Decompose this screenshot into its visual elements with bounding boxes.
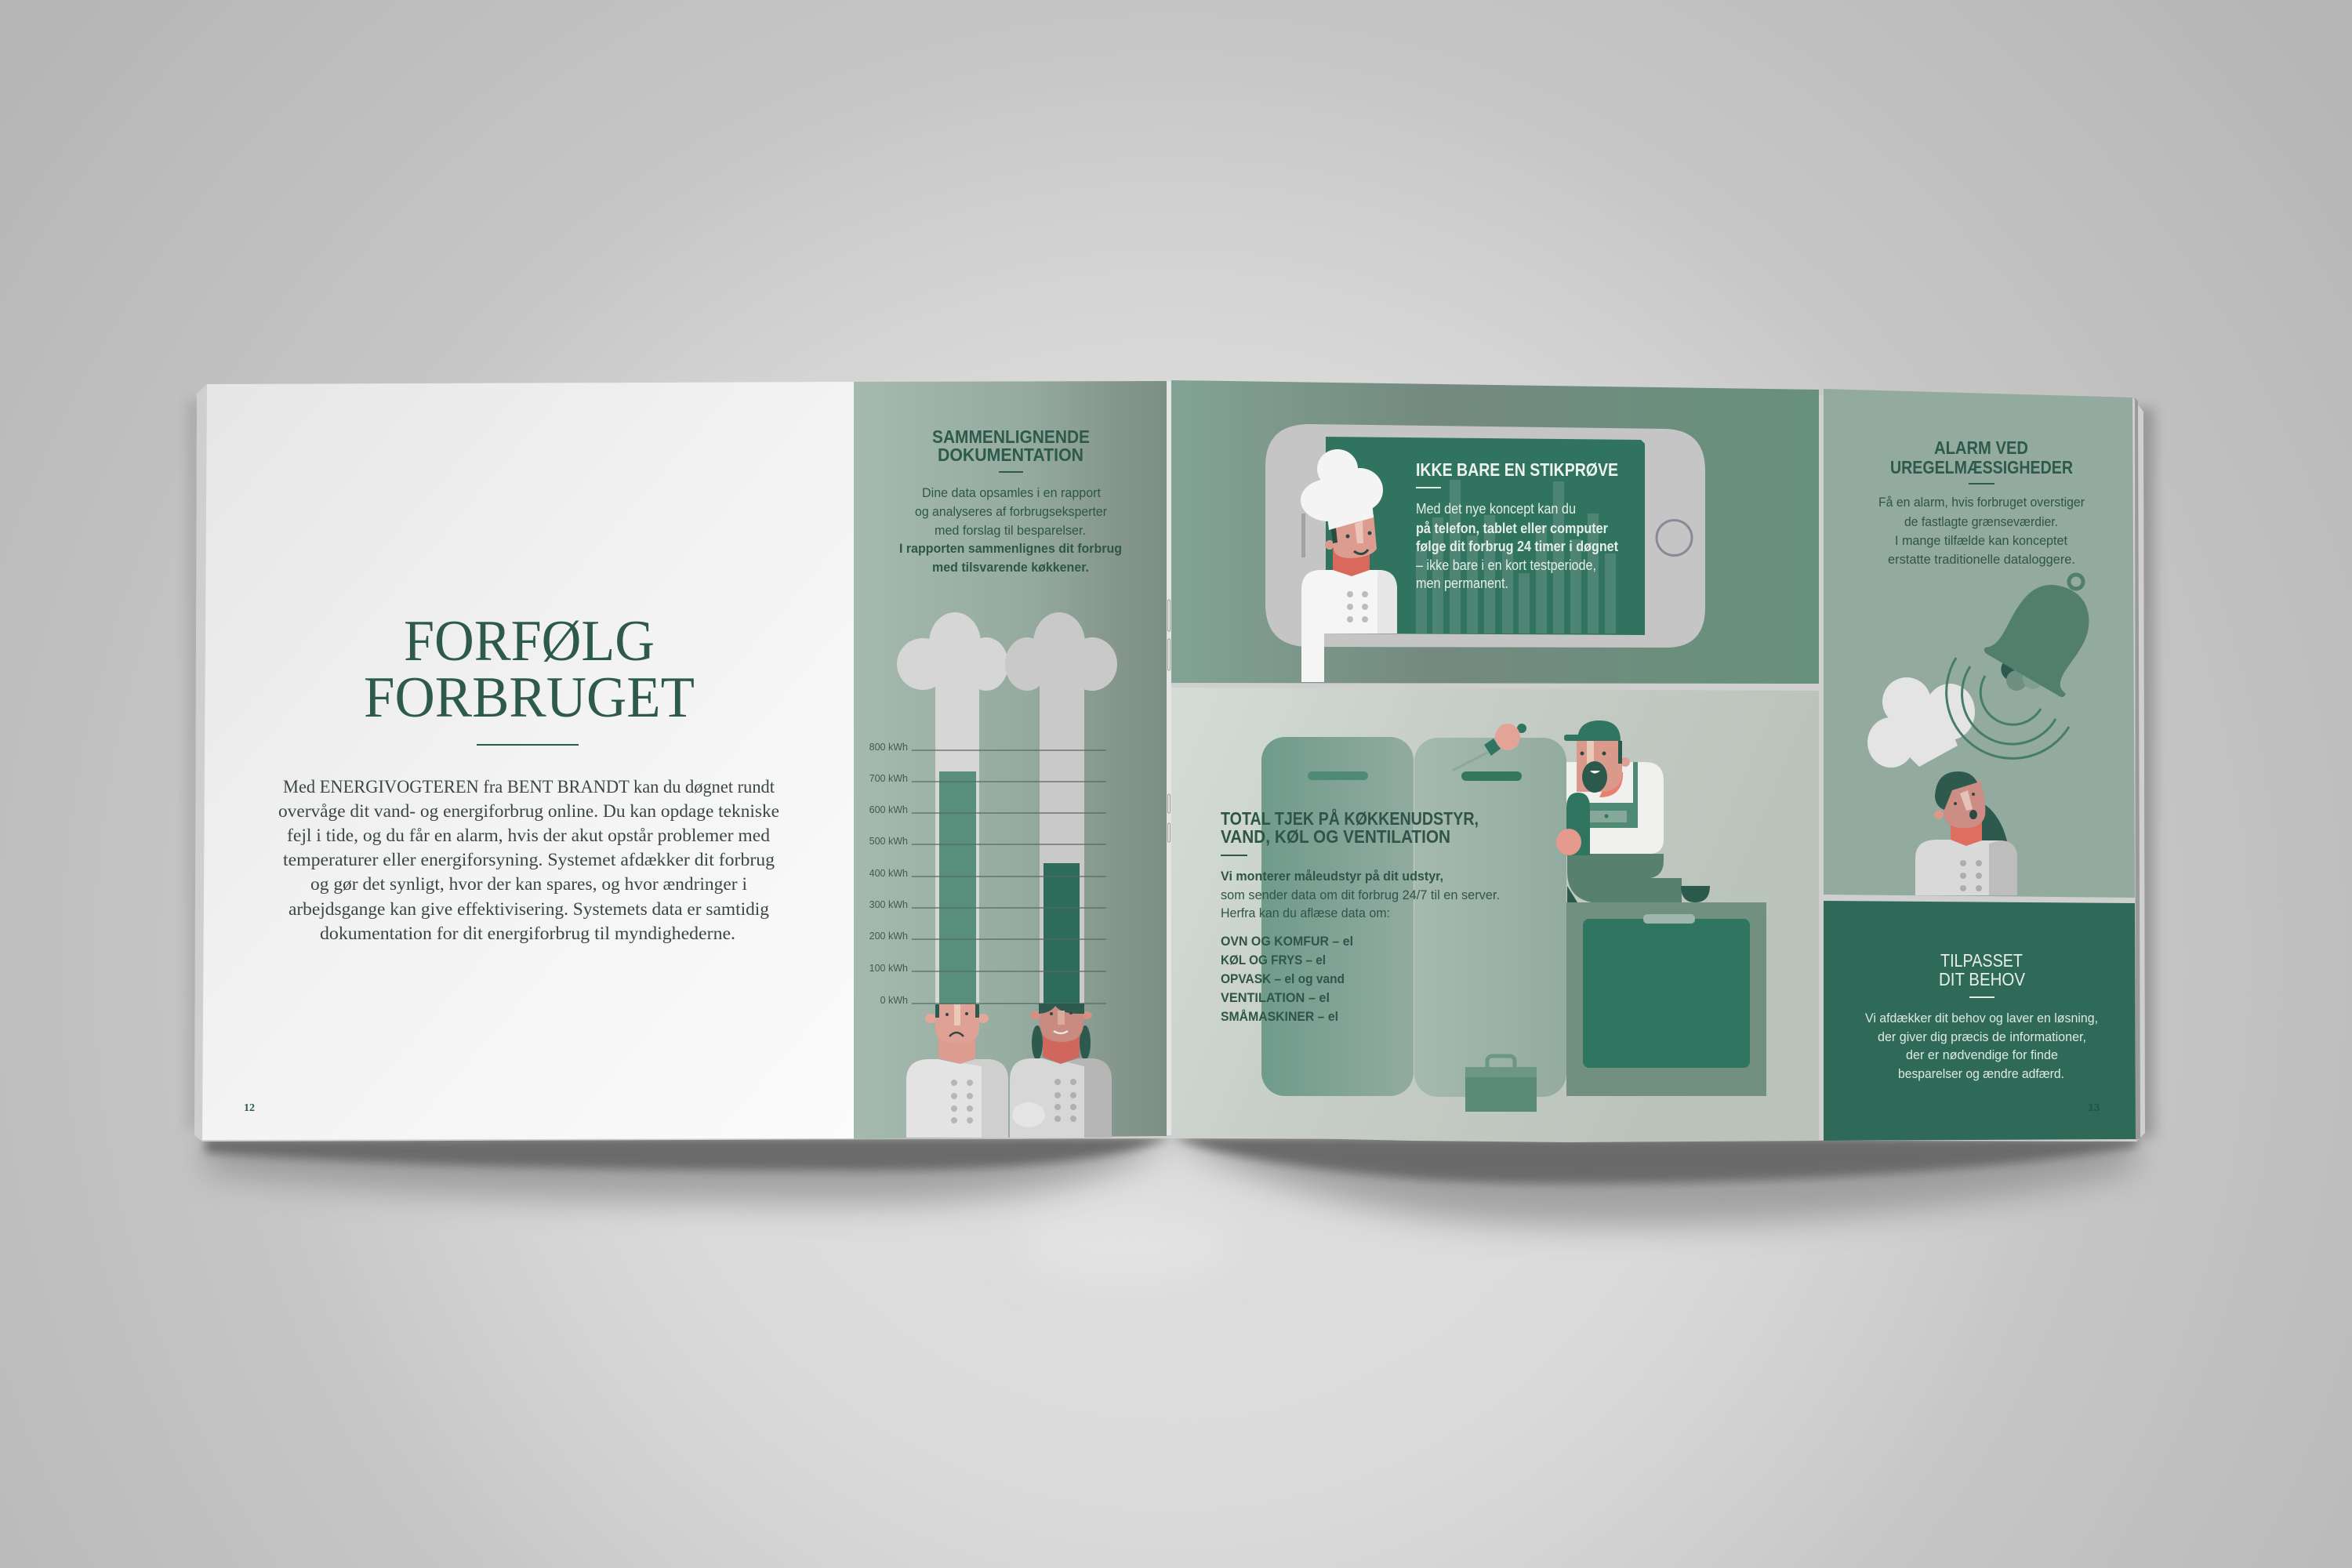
bar: 440 kWh — [1044, 863, 1080, 1004]
body text: Dine data opsamles i en rapport — [922, 485, 1101, 500]
icon: toolbox — [1465, 1056, 1537, 1112]
equipment list: SMÅMASKINER – el — [1221, 1009, 1338, 1024]
icon: flying chef hat — [1867, 677, 1975, 768]
heading — [1939, 950, 2026, 989]
axis labels: 100 kWh — [869, 963, 908, 974]
body text: Med det nye koncept kan du — [1416, 501, 1576, 517]
spine — [1167, 381, 1171, 1135]
body text: Herfra kan du aflæse data om: — [1221, 906, 1390, 920]
book shadow — [187, 400, 2154, 1282]
body text: I mange tilfælde kan konceptet — [1895, 533, 2067, 548]
body text: Få en alarm, hvis forbruget overstiger — [1878, 495, 2085, 510]
body text — [1865, 1011, 2098, 1081]
body text: og analyseres af forbrugseksperter — [915, 504, 1107, 519]
heading — [932, 426, 1090, 465]
intro text: arbejdsgange kan give effektivisering. Systemets data er samtidig — [289, 899, 770, 919]
panel: tailored to your needs — [1824, 901, 2136, 1141]
title — [364, 609, 695, 730]
title: FORFØLG — [404, 609, 655, 673]
axis labels: 300 kWh — [869, 899, 908, 910]
intro text: fejl i tide, og du får en alarm, hvis der akut opstår problemer med — [287, 826, 771, 845]
heading: SAMMENLIGNENDE — [932, 426, 1090, 447]
equipment list: OPVASK – el og vand — [1221, 971, 1345, 986]
heading — [1221, 808, 1479, 847]
axis labels: 200 kWh — [869, 931, 908, 942]
heading: TOTAL TJEK PÅ KØKKENUDSTYR, — [1221, 808, 1479, 829]
intro text: dokumentation for dit energiforbrug til myndighederne. — [320, 924, 735, 943]
page number: 13 — [2088, 1101, 2100, 1113]
bar chart: phone screen — [1416, 480, 1616, 633]
body text — [1221, 869, 1500, 920]
panel: comparative documentation — [854, 381, 1167, 1139]
body text: som sender data om dit forbrug 24/7 til en server. — [1221, 887, 1500, 902]
heading: UREGELMÆSSIGHEDER — [1890, 457, 2073, 477]
axis labels: 800 kWh — [869, 742, 908, 753]
body text: Vi afdækker dit behov og laver en løsning, — [1865, 1011, 2098, 1025]
heading: ALARM VED — [1934, 437, 2028, 458]
axis labels: 400 kWh — [869, 868, 908, 879]
axis labels: 500 kWh — [869, 836, 908, 847]
equipment list — [1221, 934, 1353, 1024]
title: FORBRUGET — [364, 666, 695, 730]
axis labels — [869, 742, 908, 1006]
body text: I rapporten sammenlignes dit forbrug — [899, 541, 1122, 556]
body text: med tilsvarende køkkener. — [932, 560, 1089, 575]
intro text — [278, 777, 779, 943]
body text: – ikke bare i en kort testperiode, — [1416, 557, 1596, 573]
intro text: og gør det synligt, hvor der kan spares, og hvor ændringer i — [310, 874, 747, 894]
body text: de fastlagte grænseværdier. — [1904, 514, 2058, 529]
icon: hat left — [897, 612, 1008, 1004]
body text — [899, 485, 1122, 575]
axis labels: 0 kWh — [880, 995, 908, 1006]
bar: 730 kWh — [939, 771, 976, 1004]
body text: på telefon, tablet eller computer — [1416, 521, 1608, 536]
body text: der giver dig præcis de informationer, — [1878, 1029, 2086, 1044]
axis labels: 600 kWh — [869, 804, 908, 815]
body text: erstatte traditionelle dataloggere. — [1888, 552, 2075, 567]
equipment list: KØL OG FRYS – el — [1221, 953, 1326, 967]
body text: Vi monterer måleudstyr på dit udstyr, — [1221, 869, 1443, 884]
body text: der er nødvendige for finde — [1906, 1047, 2058, 1062]
heading — [1890, 437, 2073, 477]
intro text: overvåge dit vand- og energiforbrug online. Du kan opdage tekniske — [278, 801, 779, 821]
axis labels: 700 kWh — [869, 773, 908, 784]
icon: hat right — [1005, 612, 1117, 1004]
body text — [1878, 495, 2085, 567]
icon: unhappy chef — [906, 1004, 1008, 1138]
icon: screwdriver and hand — [1454, 724, 1526, 770]
icon: bell — [1947, 575, 2089, 758]
panel: not just a spot check — [1171, 380, 1819, 684]
icon: fridge left — [1261, 737, 1414, 1096]
intro text: temperaturer eller energiforsyning. Systemet afdækker dit forbrug — [283, 850, 775, 869]
heading: VAND, KØL OG VENTILATION — [1221, 826, 1450, 847]
heading: DOKUMENTATION — [938, 445, 1083, 465]
brochure spread — [194, 380, 2145, 1142]
body text: med forslag til besparelser. — [935, 523, 1086, 538]
panel: left page — [202, 382, 854, 1140]
heading: DIT BEHOV — [1939, 969, 2026, 989]
page stack edges — [194, 384, 2145, 1142]
heading: IKKE BARE EN STIKPRØVE — [1416, 459, 1618, 480]
icon: worker — [1556, 720, 1710, 902]
body text: men permanent. — [1416, 575, 1508, 591]
icon: chef with phone — [1301, 449, 1397, 682]
icon: happy chef — [1010, 1004, 1112, 1138]
intro text: Med ENERGIVOGTEREN fra BENT BRANDT kan du døgnet rundt — [283, 777, 775, 797]
equipment list: VENTILATION – el — [1221, 990, 1330, 1005]
icon: surprised chef — [1915, 771, 2017, 895]
panel: total check — [1171, 688, 1819, 1142]
icon: fridge right — [1414, 738, 1566, 1097]
equipment list: OVN OG KOMFUR – el — [1221, 934, 1353, 949]
panel: alarm — [1824, 389, 2135, 898]
icon: oven — [1566, 902, 1766, 1096]
bar chart: chef hats — [869, 612, 1117, 1006]
body text — [1416, 501, 1618, 591]
body text: besparelser og ændre adfærd. — [1898, 1066, 2064, 1081]
icon: phone — [1265, 424, 1705, 648]
heading: TILPASSET — [1940, 950, 2023, 971]
body text: følge dit forbrug 24 timer i døgnet — [1416, 539, 1618, 554]
page number: 12 — [244, 1102, 255, 1114]
